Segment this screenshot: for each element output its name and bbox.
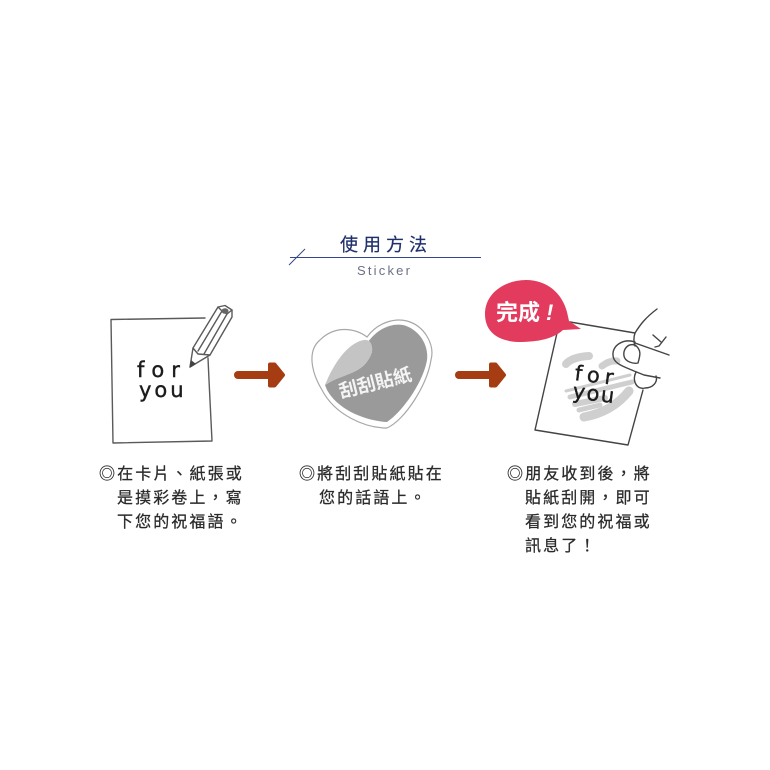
text block: step 3: 貼紙刮開，即可	[525, 489, 652, 507]
callout: completed: 完成	[496, 300, 540, 325]
heading: usage instructions: Sticker	[357, 263, 412, 278]
arrow 2 head	[491, 364, 504, 386]
text block: step 3: 看到您的祝福或	[525, 513, 652, 531]
text block: step 2: ◎將刮刮貼紙貼在	[299, 465, 444, 483]
arrow 1	[238, 371, 270, 379]
icon: pencil	[190, 306, 232, 368]
arrow 2	[459, 371, 491, 379]
step 2 illustration: heart scratch sticker	[312, 320, 432, 428]
callout: completed: !	[546, 300, 553, 325]
step 3 illustration: scratched card and hand: you	[571, 379, 617, 408]
peeled corner	[325, 340, 372, 385]
scratched heart silver	[566, 356, 632, 417]
heading: usage instructions	[289, 235, 481, 278]
text block: step 2	[299, 465, 444, 507]
icon: hand	[613, 309, 669, 388]
text block: step 2: 您的話語上。	[319, 489, 428, 507]
callout: completed	[485, 280, 581, 342]
text block: step 1: 是摸彩卷上，寫	[117, 489, 244, 507]
step 3 illustration: scratched card and hand: for	[573, 361, 620, 390]
text block: step 1	[99, 465, 244, 531]
arrow 1 head	[270, 364, 283, 386]
step 3 illustration: scratched card and hand	[535, 309, 669, 445]
text block: step 1: ◎在卡片、紙張或	[99, 465, 244, 483]
step 1 illustration: card and pencil: you	[139, 378, 187, 402]
heading: usage instructions: 使用方法	[340, 235, 432, 255]
text block: step 1: 下您的祝福語。	[117, 513, 244, 531]
sticker label: 刮刮貼紙	[337, 363, 414, 402]
step 1 illustration: card and pencil	[111, 306, 232, 443]
text block: step 3	[507, 465, 652, 555]
text block: step 3: 訊息了！	[525, 537, 597, 555]
text block: step 3: ◎朋友收到後，將	[507, 465, 652, 483]
step 1 illustration: card and pencil: for	[137, 358, 187, 382]
